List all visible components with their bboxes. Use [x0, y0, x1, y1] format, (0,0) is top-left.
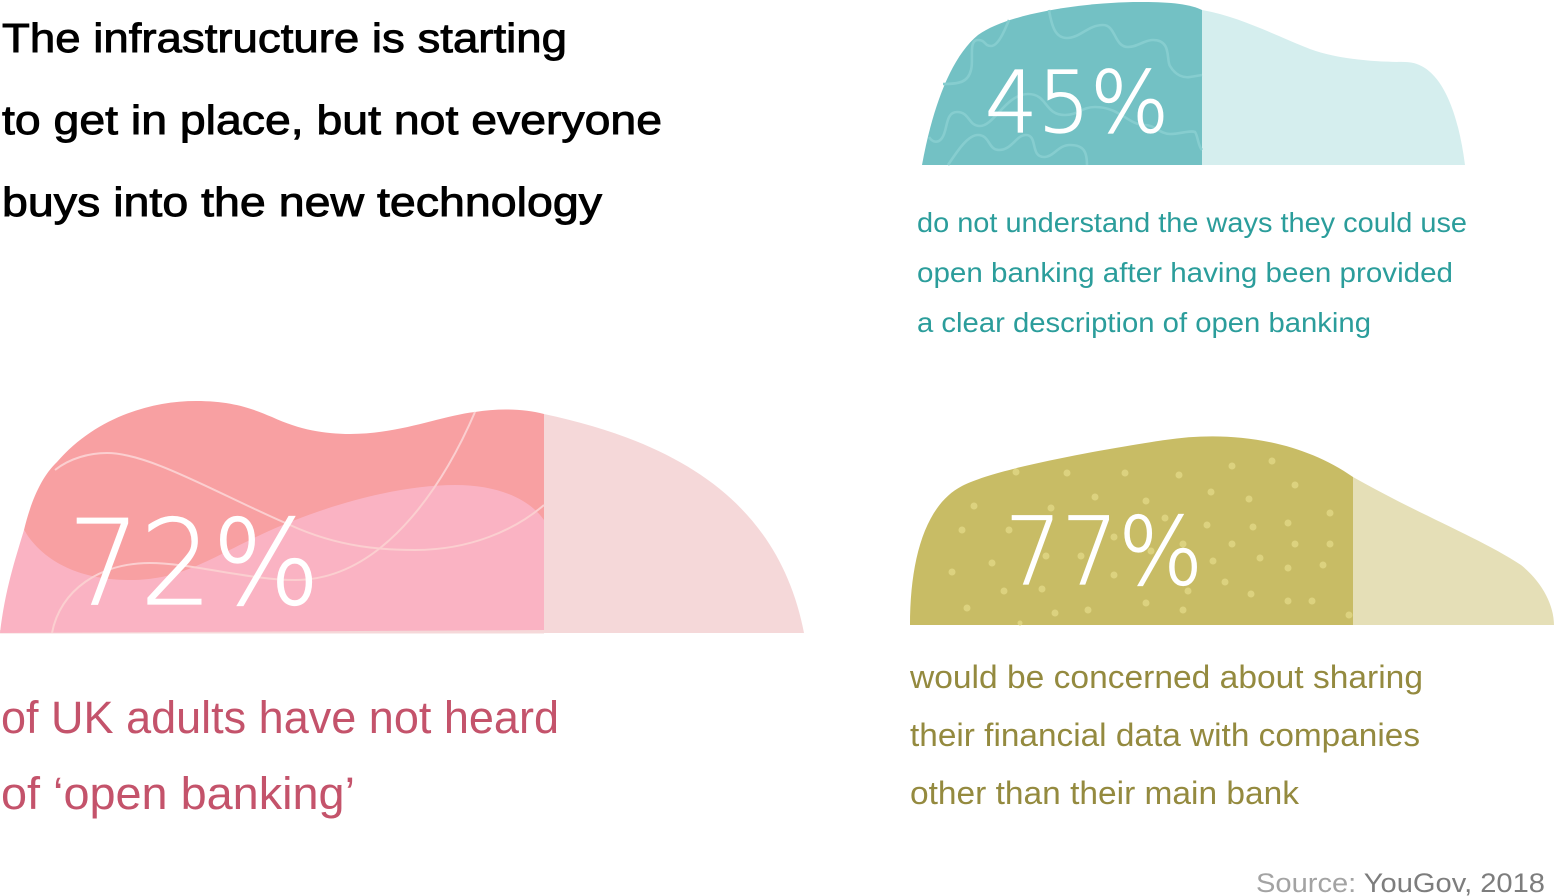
caption: 77%: would be concerned about sharing: [909, 659, 1423, 695]
title: buys into the new technology: [2, 179, 603, 225]
dot pattern: [949, 458, 1352, 625]
caption: 77%: their financial data with companies: [910, 717, 1420, 753]
caption: 45%: [917, 207, 1467, 338]
panel: 77% statistic: [909, 436, 1554, 811]
pink shape filled portion: [24, 401, 544, 600]
title: [2, 15, 662, 225]
olive shape remainder: [1353, 477, 1554, 625]
flowing lines: [52, 412, 544, 633]
panel: 72% statistic: [0, 401, 804, 819]
value: 77%: 77%: [1005, 498, 1203, 607]
squiggle pattern: [929, 10, 1202, 165]
panel: 45% statistic: [917, 2, 1467, 338]
teal shape filled portion: [922, 2, 1202, 165]
caption: 45%: open banking after having been provided: [917, 257, 1453, 288]
caption: 72%: of UK adults have not heard: [1, 692, 559, 743]
caption: 45%: a clear description of open banking: [917, 307, 1371, 338]
caption: 72%: [1, 692, 559, 819]
value: 72%: 72%: [68, 494, 320, 632]
pink overlapping wave: [0, 485, 544, 633]
caption: 72%: of ‘open banking’: [1, 768, 355, 819]
teal shape remainder: [1202, 10, 1465, 165]
caption: 77%: [909, 659, 1423, 811]
title: to get in place, but not everyone: [2, 97, 662, 143]
title: The infrastructure is starting: [2, 15, 567, 61]
caption: 77%: other than their main bank: [910, 775, 1300, 811]
pink shape remainder: [544, 414, 804, 633]
value: 45%: 45%: [985, 54, 1169, 153]
caption: 45%: do not understand the ways they could use: [917, 207, 1467, 238]
olive shape filled portion: [910, 436, 1353, 625]
